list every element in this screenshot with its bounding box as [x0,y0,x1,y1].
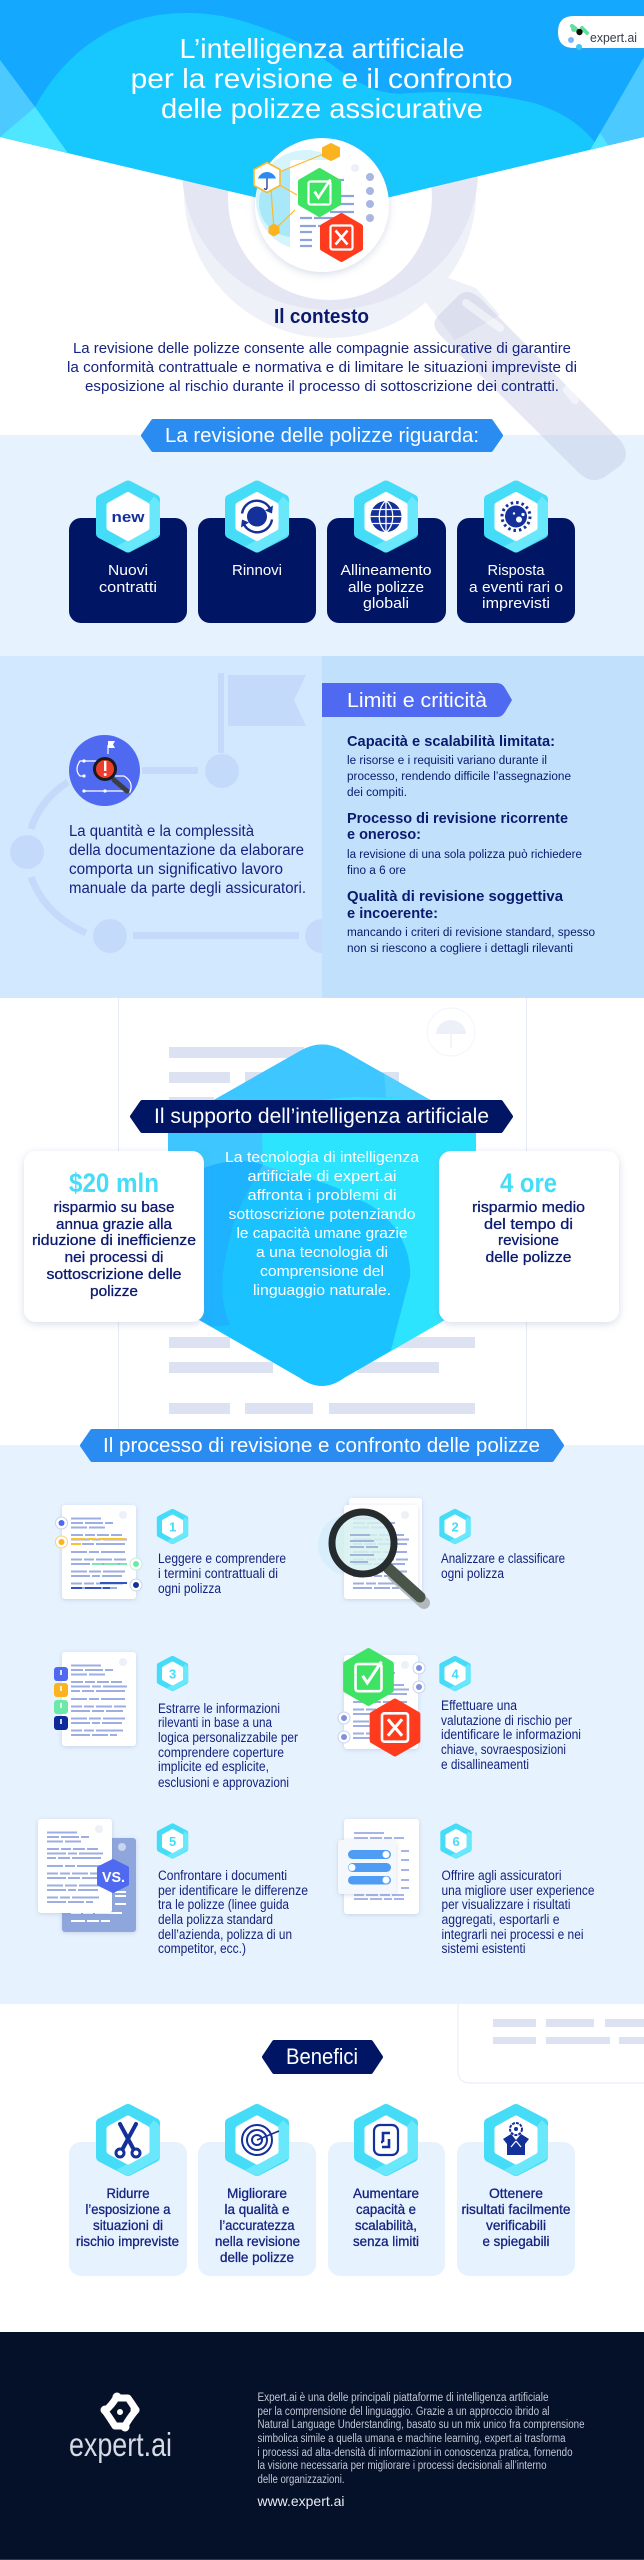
badge: number 3 [159,1658,188,1691]
step 3: extract information: implicite ed esplicite, [158,1759,269,1774]
card: reduce exposure: rischio impreviste [76,2233,179,2249]
step 4: risk assessment: Effettuare una [441,1698,517,1713]
step 3: extract information: esclusioni e approvazioni [158,1775,289,1790]
text block: about expert.ai: simbolica simile a quella umana e machine learning, expert.ai trasforma [258,2433,566,2445]
badge: number 1 [159,1511,188,1544]
step 4: risk assessment: valutazione di rischio per [441,1713,572,1728]
stat card: 4 hours saved: del tempo di [484,1217,573,1233]
card: improve quality [198,2109,316,2276]
panel: blue AI hexagon [168,1044,476,1386]
card: increase capacity: scalabilità, [355,2217,417,2233]
badge: number 3: 3 [169,1666,176,1682]
panel: review process background [0,1445,644,2004]
icon: VS hexagon [99,1861,127,1891]
badge: number 6: 6 [452,1834,460,1849]
icon: new: new [112,509,145,526]
card: rare or unforeseen events [457,486,575,623]
icon: VS hexagon: VS. [102,1869,125,1886]
icon: open box with gear [489,2109,548,2176]
card: reduce exposure: situazioni di [93,2217,163,2233]
logo: expert.ai: expert.ai [69,2426,172,2463]
panel: limits and critical issues (right) [322,656,644,998]
text block: context: La revisione delle polizze consente alle compagnie assicurative di garantire [73,340,571,357]
step 6: better user experience: integrarli nei processi e nei [442,1927,584,1942]
background: process path with flag [10,673,339,953]
card: rare or unforeseen events: imprevisti [482,596,550,612]
panel: policy review section background [0,435,644,656]
text block: capacity: dei compiti. [347,787,407,799]
title: per la revisione e il confronto [131,63,513,94]
stat card: 4 hours saved: 4 ore [500,1168,557,1198]
step 3: extract information: comprendere coperture [158,1745,284,1760]
text block: recurring process: la revisione di una sola polizza può richiedere [347,849,582,861]
text block: about expert.ai: i processi ad alta-densità di informazioni in conoscenza pratica, fornendo [258,2447,572,2459]
icon: umbrella in a hexagon [254,162,280,192]
step 4: risk assessment [338,1651,581,1772]
icon: scissors [101,2109,160,2176]
text block: subjective quality: e incoerente: [347,905,438,922]
card: improve quality: la qualità e [224,2201,290,2217]
step 1: read and understand: Leggere e comprendere [158,1551,286,1566]
heading pill: policy review covers [143,421,501,450]
icon: renewal arrows [230,486,289,552]
text block: about expert.ai: Expert.ai è una delle principali piattaforme di intelligenza artificiale [258,2392,548,2404]
card: improve quality: delle polizze [220,2249,294,2265]
step 5: compare documents [38,1819,308,1956]
card: increase capacity [328,2109,445,2276]
step 6: better user experience: aggregati, esportarli e [442,1912,560,1927]
background: faded document corner [458,2004,644,2083]
step 5: compare documents: per identificare le differenze [158,1883,308,1898]
badge: number 5: 5 [169,1834,176,1849]
text block: about expert.ai: per la comprensione del linguaggio. Grazie a un approccio ibrido al [258,2406,550,2418]
card: renewals: Rinnovi [232,563,282,579]
logo: expert.ai [69,2392,172,2463]
text block: subjective quality [347,888,595,955]
card: global alignment: Allineamento [340,563,432,579]
badge: number 4: 4 [452,1666,460,1682]
step 2: analyze and classify [318,1498,565,1603]
step 6: better user experience: Offrire agli assicuratori [442,1868,562,1883]
stat card: 4 hours saved: delle polizze [486,1250,572,1266]
text block: recurring process [347,810,582,877]
step 2: analyze and classify: ogni polizza [441,1566,504,1581]
text block: AI technology: sottoscrizione potenziando [228,1206,416,1223]
stat card: 20 million savings: risparmio su base [54,1200,174,1216]
step 5: compare documents: della polizza standard [158,1912,273,1927]
step 4: risk assessment: chiave, sovraesposizioni [441,1742,566,1757]
text block: AI technology [225,1149,420,1299]
text block: about expert.ai: delle organizzazioni. [258,2474,344,2486]
stat card: 20 million savings: riduzione di inefficienze [32,1233,196,1249]
badge: number 4 [442,1658,471,1691]
text block: context: la conformità contrattuale e normativa e di limitare le situazioni impreviste di [67,359,577,376]
text block: capacity: Capacità e scalabilità limitata: [347,733,555,750]
text block: capacity: le risorse e i requisiti variano durante il [347,755,547,767]
step 3: extract information: rilevanti in base a una [158,1715,272,1730]
badge: number 6 [443,1826,472,1859]
stat card: 20 million savings: nei processi di [64,1250,164,1266]
heading pill: benefits: Benefici [286,2044,358,2069]
heading pill: policy review covers: La revisione delle polizze riguarda: [165,425,479,447]
badge: number 1: 1 [169,1520,176,1534]
card: new contracts: Nuovi [108,563,148,579]
card: reduce exposure [69,2109,187,2276]
text block: subjective quality: Qualità di revisione soggettiva [347,888,564,905]
card: renewals [198,486,316,623]
text block: context: esposizione al rischio durante il processo di sottoscrizione dei contratti. [85,378,559,395]
step 6: better user experience: sistemi esistenti [442,1941,526,1956]
badge: number 5 [159,1826,188,1859]
title [131,33,513,124]
step 3: extract information [54,1652,298,1790]
step 2: analyze and classify: Analizzare e classificare [441,1551,565,1566]
stat card: 20 million savings: sottoscrizione delle [46,1267,182,1283]
text block: recurring process: e oneroso: [347,826,421,843]
text block: about expert.ai: Natural Language Understanding, basato su un mix unico fra comprensione [258,2419,584,2431]
logo badge: expert.ai: expert.ai [590,30,637,45]
stat card: 4 hours saved [439,1151,619,1322]
card: increase capacity: capacità e [356,2201,416,2217]
text block: manual work: manuale da parte degli assicuratori. [69,880,306,897]
text block: about expert.ai: la visione necessaria per migliorare i processi decisionali all’interno [258,2460,546,2472]
heading pill: benefits [264,2042,381,2072]
text block: AI technology: linguaggio naturale. [253,1282,391,1299]
text block: recurring process: fino a 6 ore [347,865,406,877]
background: faded policy document [118,998,527,1445]
card: rare or unforeseen events: Risposta [488,563,545,579]
card: reduce exposure: l’esposizione a [86,2201,171,2217]
card: global alignment: globali [363,596,409,612]
card: verifiable results: Ottenere [489,2185,543,2201]
text block: context [67,340,577,395]
badge: number 2: 2 [452,1520,459,1534]
stat card: 4 hours saved: risparmio medio [472,1200,585,1216]
heading: context: Il contesto [274,306,369,328]
text block: AI technology: comprensione del [260,1263,384,1280]
background: large magnifying glass [182,30,626,480]
text block: manual work [69,823,306,897]
text block: subjective quality: non si riescono a cogliere i dettagli rilevanti [347,943,573,955]
icon: target [230,2109,289,2176]
step 5: compare documents: tra le polizze (linee guida [158,1897,289,1912]
step 3: extract information: logica personalizzabile per [158,1730,298,1745]
card: increase capacity: senza limiti [353,2233,419,2249]
website: www.expert.ai [257,2493,344,2509]
step 1: read and understand: ogni polizza [158,1581,221,1596]
step 3: extract information: Estrarre le informazioni [158,1701,280,1716]
card: rare or unforeseen events: a eventi rari o [469,580,563,596]
text block: capacity: processo, rendendo difficile l’assegnazione [347,771,571,783]
step 6: better user experience [338,1819,594,1956]
text block: recurring process: Processo di revisione ricorrente [347,810,568,827]
step 4: risk assessment: identificare le informazioni [441,1727,581,1742]
card: new contracts: contratti [99,580,157,596]
step 5: compare documents: competitor, ecc.) [158,1941,246,1956]
text block: subjective quality: mancando i criteri di revisione standard, spesso [347,927,595,939]
step 6: better user experience: per visualizzare i risultati [442,1897,570,1912]
icon: globe [359,486,418,552]
text block: AI technology: le capacità umane grazie [236,1225,408,1242]
card: reduce exposure: Ridurre [106,2185,150,2201]
stat card: 20 million savings: polizze [90,1284,138,1300]
icon: scaling bracket [359,2109,418,2176]
text block: AI technology: artificiale di expert.ai [248,1168,396,1185]
icon: faded umbrella [427,1008,475,1056]
hero banner [0,0,644,198]
stat card: 4 hours saved: revisione [498,1233,559,1249]
card: verifiable results [457,2109,575,2276]
card: verifiable results: risultati facilmente [462,2201,571,2217]
text block: AI technology: a una tecnologia di [256,1244,388,1261]
title: L’intelligenza artificiale [180,33,464,64]
card: new contracts [69,486,187,623]
card: global alignment: alle polizze [348,580,424,596]
card: verifiable results: verificabili [486,2217,546,2233]
logo badge: expert.ai [558,16,644,50]
text block: AI technology: affronta i problemi di [248,1187,396,1204]
text block: manual work: della documentazione da elaborare [69,842,304,859]
card: improve quality: nella revisione [215,2233,300,2249]
card: improve quality: l’accuratezza [220,2217,295,2233]
card: verifiable results: e spiegabili [482,2233,550,2249]
step 1: read and understand: i termini contrattuali di [158,1566,278,1581]
step 1: read and understand [56,1505,286,1599]
title: delle polizze assicurative [161,93,483,124]
card: increase capacity: Aumentare [353,2185,419,2201]
stat card: 20 million savings: annua grazie alla [56,1217,173,1233]
panel: limits and critical issues (right): Limiti e criticità [347,690,488,712]
badge: number 2 [442,1511,471,1544]
text block: about expert.ai [258,2392,584,2486]
step 5: compare documents: dell’azienda, polizza di un [158,1927,292,1942]
icon: magnifying glass [332,1512,424,1603]
panel: manual work (left) [0,656,339,998]
hero illustration: document review in a magnifier [254,138,389,272]
icon: flag route with warning magnifier [69,735,140,806]
footer [0,2332,644,2560]
heading pill: review process [82,1431,562,1460]
card: improve quality: Migliorare [227,2185,287,2201]
card: global alignment [327,486,446,623]
step 6: better user experience: una migliore user experience [442,1883,594,1898]
step 5: compare documents: Confrontare i documenti [158,1868,287,1883]
heading tab: limits [322,683,512,717]
heading pill: AI support: Il supporto dell’intelligenza artificiale [154,1105,489,1128]
text block: manual work: comporta un significativo lavoro [69,861,283,878]
text block: capacity [347,733,571,799]
stat card: 20 million savings [24,1151,204,1322]
stat card: 20 million savings: $20 mln [69,1168,159,1198]
heading pill: review process: Il processo di revisione e confronto delle polizze [103,1435,540,1457]
text block: manual work: La quantità e la complessità [69,823,254,840]
text block: AI technology: La tecnologia di intelligenza [225,1149,420,1166]
step 4: risk assessment: e disallineamenti [441,1757,529,1772]
icon: virus [489,486,548,552]
